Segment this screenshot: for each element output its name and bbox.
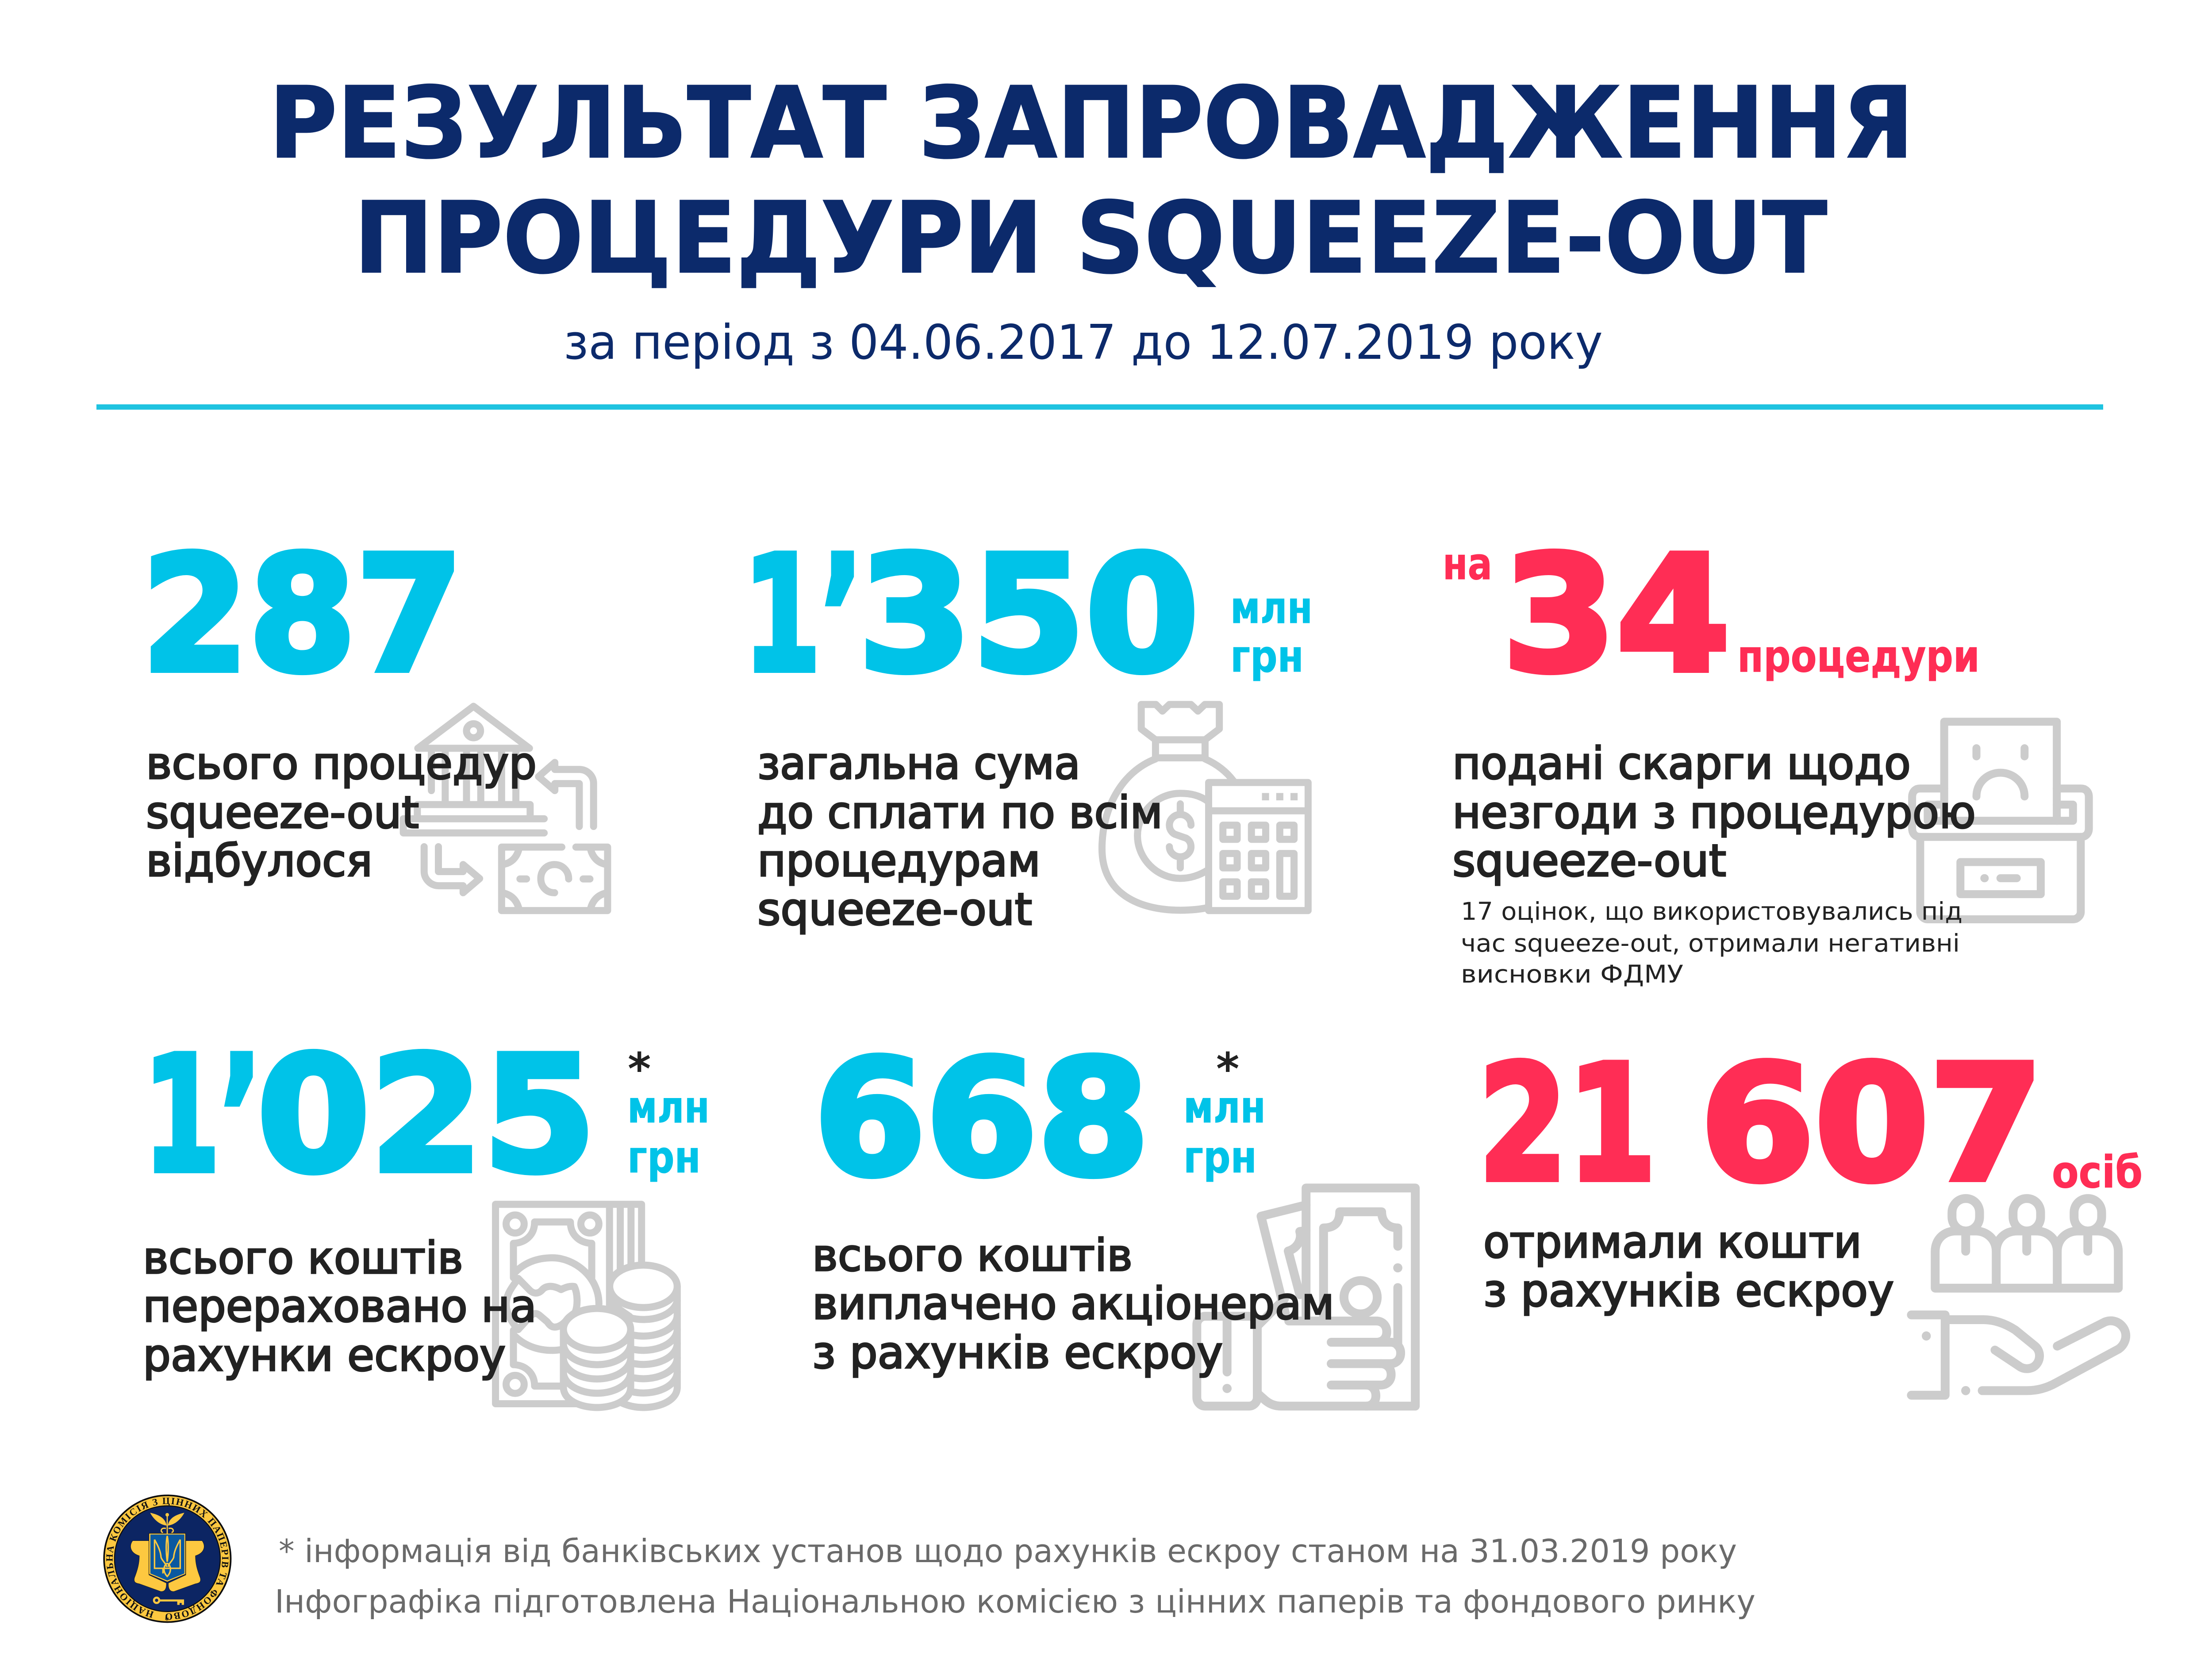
panel: 668 mln UAH	[812, 1026, 1334, 1379]
icon: hand with cash	[1197, 1188, 1415, 1406]
text: total amount: до сплати по всім	[757, 787, 1163, 838]
note: 17 valuations: час squeeze-out, отримали негативні	[1461, 929, 1960, 957]
unit: mln UAH	[1230, 582, 1313, 682]
icon: printer with sad sheet	[1912, 722, 2089, 919]
text: paid to shareholders: виплачено акціонерам	[812, 1278, 1334, 1329]
number: 287: 287	[142, 522, 463, 707]
text: total procedures: squeeze-out	[146, 787, 419, 838]
unit: mln UAH: грн	[1230, 630, 1304, 682]
text: complaints filed: squeeze-out	[1452, 835, 1726, 887]
text: paid to shareholders: всього коштів	[812, 1229, 1133, 1281]
text: complaints filed	[1452, 737, 1976, 887]
unit: mln UAH	[1183, 1081, 1266, 1183]
icon: people and open hand	[1911, 1198, 2126, 1395]
logo: national securities commission seal: *	[165, 1615, 169, 1625]
text: total procedures: відбулося	[146, 835, 373, 887]
unit: persons: осіб	[2052, 1146, 2143, 1198]
number: 1'025: 1’	[143, 1022, 262, 1208]
title	[269, 66, 1914, 296]
text: transferred to escrow	[143, 1232, 537, 1381]
text: paid to shareholders	[812, 1229, 1334, 1379]
number: 21 607: 21	[1479, 1031, 1656, 1217]
footnote text: * інформація від банківських установ щодо рахунків ескроу станом на 31.03.2019 року	[279, 1532, 1737, 1570]
text: transferred to escrow: рахунки ескроу	[143, 1329, 506, 1381]
footnote asterisk: *	[1216, 1043, 1239, 1095]
note: 17 valuations: висновки ФДМУ	[1461, 960, 1683, 988]
icon: banknote with coin stacks	[495, 1204, 677, 1407]
number: 1'350: 1’	[743, 522, 863, 707]
unit: mln UAH: млн	[1230, 582, 1313, 634]
text: received funds: з рахунків ескроу	[1483, 1265, 1894, 1317]
text: received funds	[1483, 1216, 1894, 1317]
icon: bank and money exchange	[403, 707, 607, 910]
footnote text: Інфографіка підготовлена Національною комісією з цінних паперів та фондового ринку	[275, 1583, 1755, 1620]
unit: mln UAH: млн	[1183, 1081, 1266, 1133]
text: total amount: загальна сума	[757, 737, 1080, 789]
panel: 1'350 mln UAH	[743, 522, 1313, 935]
number: 34: 34	[1502, 522, 1730, 707]
title: РЕЗУЛЬТАТ ЗАПРОВАДЖЕННЯ	[269, 66, 1914, 180]
unit: mln UAH: грн	[1183, 1131, 1257, 1183]
note: 17 valuations	[1461, 897, 1962, 988]
unit: mln UAH: млн	[627, 1081, 710, 1133]
note: 17 valuations: 17 оцінок, що використовувались під	[1461, 897, 1962, 926]
text: total amount: squeeze-out	[757, 883, 1032, 935]
text: total procedures	[146, 737, 537, 887]
panel: 21 607 persons	[1479, 1031, 2143, 1317]
prefix: на: на	[1443, 538, 1492, 590]
unit: mln UAH: грн	[627, 1131, 701, 1183]
number: 1'350: 350	[858, 522, 1199, 707]
text: complaints filed: подані скарги щодо	[1452, 737, 1911, 789]
unit: mln UAH	[627, 1081, 710, 1183]
text: complaints filed: незгоди з процедурою	[1452, 787, 1976, 838]
footnote asterisk: *	[628, 1043, 651, 1095]
panel: 287 procedures	[142, 522, 537, 887]
footnote text	[275, 1532, 1755, 1620]
text: received funds: отримали кошти	[1483, 1216, 1862, 1268]
number: 1'025: 025	[257, 1022, 596, 1208]
number: 668: 668	[814, 1026, 1149, 1211]
subtitle: period: за період з 04.06.2017 до 12.07.2019 року	[564, 315, 1603, 370]
panel: 34 complaints	[1443, 522, 1980, 988]
unit: procedures: процедури	[1737, 630, 1980, 682]
logo: national securities commission seal: НАЦІОНАЛЬНА КОМІСІЯ З ЦІННИХ ПАПЕРІВ ТА ФОНДОВОГО РИНКУ	[84, 1478, 231, 1622]
number: 21 607: 607	[1700, 1031, 2043, 1217]
number: 21 607	[1479, 1031, 2043, 1217]
text: transferred to escrow: всього коштів	[143, 1232, 463, 1284]
panel: 1'025 mln UAH	[143, 1022, 710, 1381]
text: total amount	[757, 737, 1163, 935]
text: paid to shareholders: з рахунків ескроу	[812, 1327, 1223, 1379]
text: transferred to escrow: перераховано на	[143, 1280, 537, 1332]
text: total amount: процедурам	[757, 835, 1041, 887]
icon: money bag with calculator	[1102, 704, 1308, 910]
text: total procedures: всього процедур	[146, 737, 537, 789]
title: ПРОЦЕДУРИ SQUEEZE-OUT	[354, 181, 1827, 296]
